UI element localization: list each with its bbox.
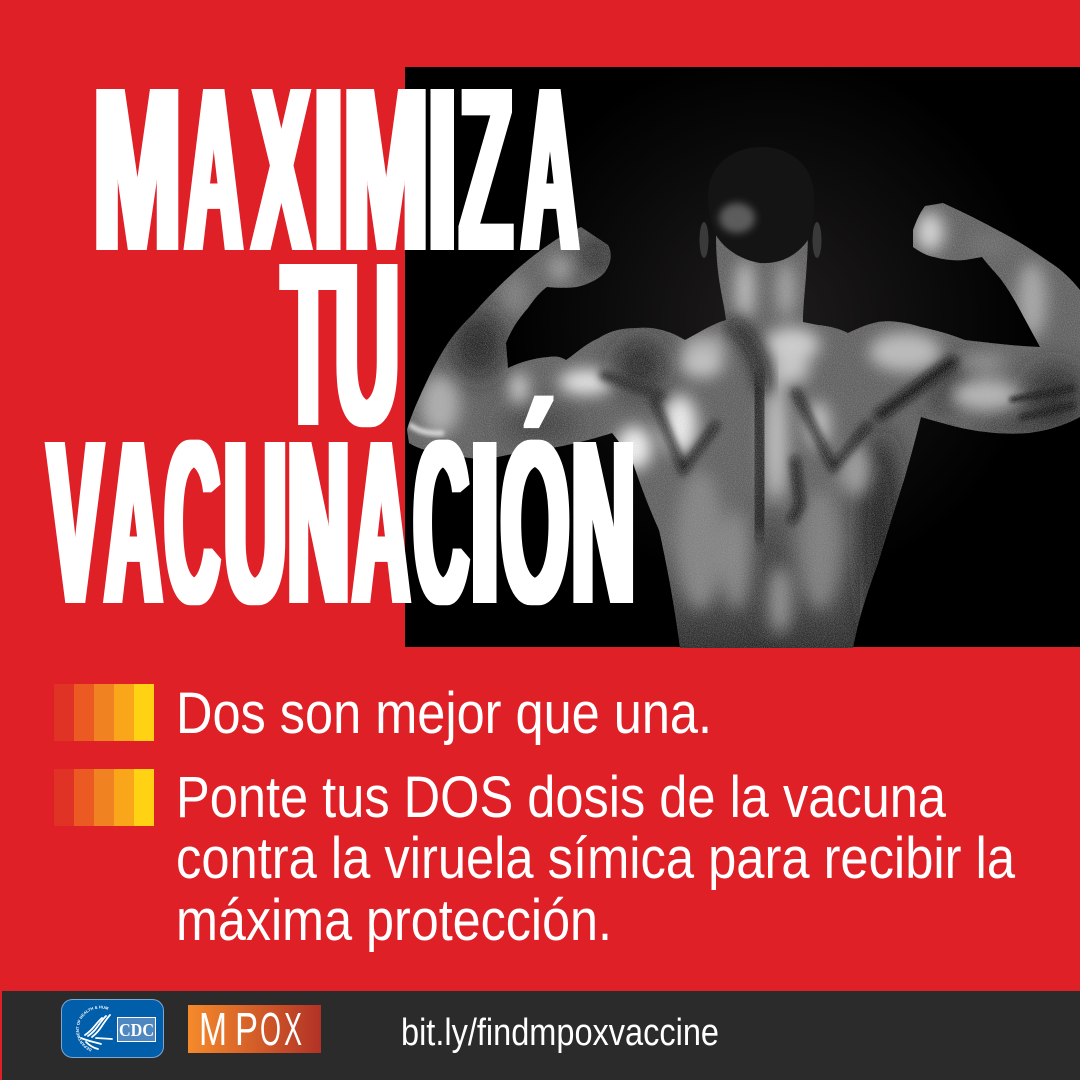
title: X: [253, 38, 310, 300]
footer bar: [2, 991, 1080, 1080]
title: Z: [460, 38, 512, 300]
ears: [700, 222, 822, 258]
text: first message: Dos son mejor que una.: [176, 681, 712, 746]
logo: MPOX: P: [235, 1003, 258, 1055]
title: A: [353, 391, 410, 653]
title: M: [93, 38, 181, 300]
title: A: [186, 38, 242, 300]
title: V: [48, 391, 102, 653]
title: U: [224, 391, 286, 653]
title: A: [105, 391, 162, 653]
text: N: [572, 391, 635, 653]
title: C: [165, 391, 219, 653]
title: C: [414, 391, 468, 653]
title: T: [282, 213, 334, 475]
title: Ó: [501, 391, 569, 653]
logo: CDC: DEPARTMENT OF HEALTH & HUMAN SERVICES USA: [76, 1006, 108, 1052]
text: second message: máxima protección.: [176, 888, 612, 953]
link: bit.ly/findmpoxvaccine: [401, 1012, 719, 1054]
logo: CDC: CDC: [119, 1020, 154, 1040]
head and hair: [708, 147, 814, 263]
bullet icon: first orange stripes: [54, 684, 154, 741]
text: second message: [176, 765, 1016, 953]
photo panel: muscular man flexing, seen from behind: [405, 67, 1080, 650]
logo: MPOX: X: [284, 1003, 302, 1055]
title: U: [335, 213, 399, 475]
title: I: [427, 38, 457, 300]
title: I: [313, 38, 344, 300]
logo: CDC: [61, 999, 164, 1058]
title: N: [288, 391, 350, 653]
body: [407, 203, 1080, 648]
bullet icon: second orange stripes: [54, 769, 154, 826]
title: [48, 38, 635, 653]
logo: MPOX: [188, 1003, 321, 1055]
logo: MPOX: M: [199, 1003, 227, 1055]
title: A: [522, 38, 578, 300]
title: I: [470, 391, 500, 653]
title: M: [344, 38, 428, 300]
logo: MPOX: O: [260, 1003, 281, 1055]
text: second message: Ponte tus DOS dosis de la vacuna: [176, 765, 947, 830]
